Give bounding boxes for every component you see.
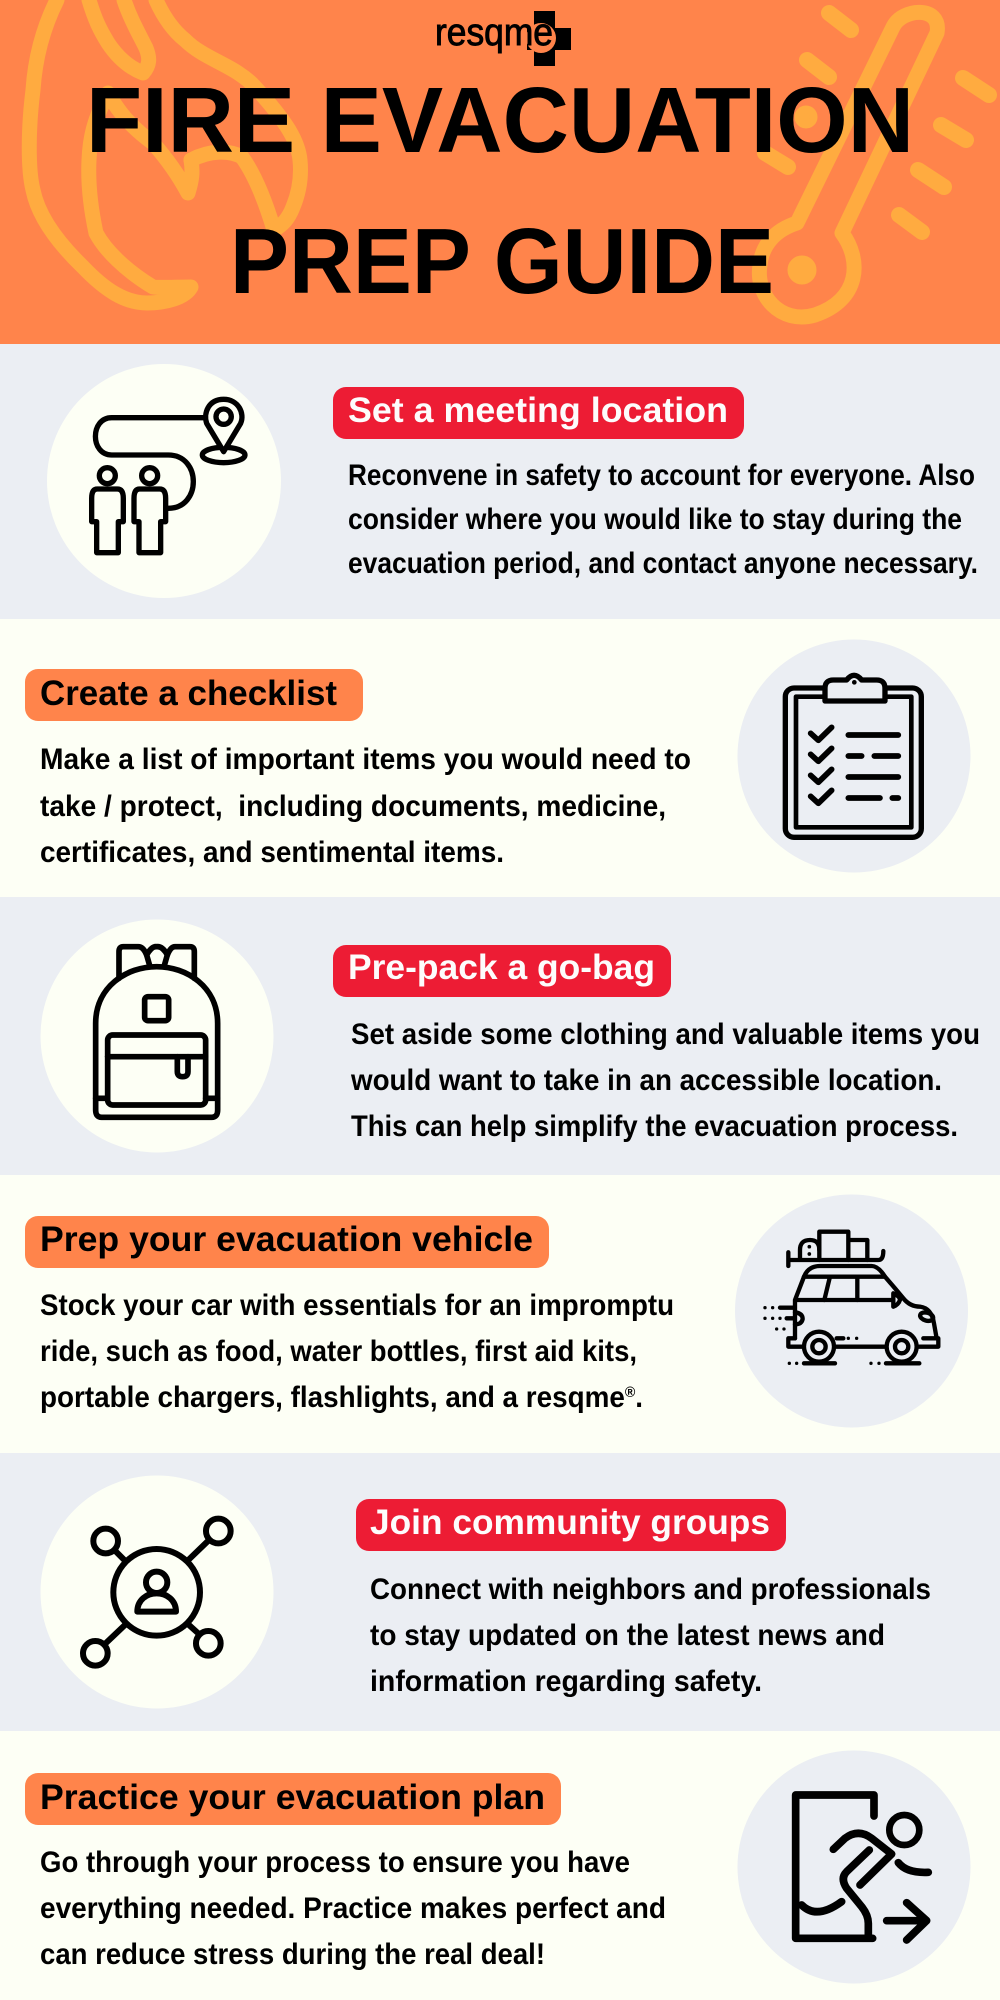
panel: join community groups (0, 1453, 1000, 1731)
heading pill: Create a checklist (40, 674, 337, 713)
body text: portable chargers, flashlights, and a resqme (40, 1381, 660, 1414)
body text: Go through your process to ensure you have (40, 1846, 630, 1879)
body text: Connect with neighbors and professionals (370, 1573, 931, 1606)
body text: everything needed. Practice makes perfect and (40, 1892, 666, 1925)
icon: clipboard checklist (738, 640, 970, 872)
body text: ® (625, 1384, 635, 1401)
icon: people route to map pin (47, 364, 281, 598)
body text: Stock your car with essentials for an impromptu (40, 1289, 674, 1322)
heading pill (25, 669, 363, 721)
icon: loaded car (735, 1194, 968, 1428)
panel: practice your evacuation plan (0, 1731, 1000, 2000)
icon: backpack (40, 920, 274, 1152)
heading pill: Pre-pack a go-bag (348, 948, 655, 987)
heading pill: Prep your evacuation vehicle (40, 1220, 533, 1259)
body text (40, 1846, 666, 1971)
body text: can reduce stress during the real deal! (40, 1938, 545, 1971)
body text: take / protect, including documents, medicine, (40, 790, 666, 823)
panel: set a meeting location (0, 344, 1000, 619)
title (86, 68, 914, 313)
heading pill (333, 945, 671, 997)
body text: to stay updated on the latest news and (370, 1619, 885, 1652)
heading pill (25, 1773, 561, 1825)
heading pill (356, 1499, 786, 1551)
heading pill (333, 387, 744, 439)
body text: certificates, and sentimental items. (40, 836, 504, 869)
heading pill (25, 1216, 549, 1268)
body text: information regarding safety. (370, 1665, 762, 1698)
body text (348, 459, 978, 580)
body text (40, 1289, 674, 1414)
heading pill: Set a meeting location (348, 391, 728, 430)
icon: person running out of door (738, 1750, 970, 1984)
icon: background flame (29, 0, 301, 303)
panel: create a checklist (0, 619, 1000, 897)
body text (40, 743, 691, 869)
icon: community network (40, 1476, 274, 1708)
body text (370, 1573, 931, 1698)
heading pill: Join community groups (370, 1503, 770, 1542)
title: FIRE EVACUATION (86, 68, 914, 172)
body text: Make a list of important items you would need to (40, 743, 691, 776)
heading pill: Practice your evacuation plan (40, 1778, 545, 1817)
panel: pre-pack a go-bag (0, 897, 1000, 1175)
logo: resqme: resqme (435, 12, 553, 54)
body text: This can help simplify the evacuation process. (351, 1110, 958, 1143)
body text: would want to take in an accessible location. (350, 1064, 942, 1097)
title: PREP GUIDE (230, 209, 774, 313)
panel: header (0, 0, 1000, 344)
body text: ride, such as food, water bottles, first aid kits, (40, 1335, 637, 1368)
panel: prep your evacuation vehicle (0, 1175, 1000, 1453)
body text: . (635, 1381, 643, 1414)
body text (350, 1018, 980, 1143)
icon: background thermometer (759, 12, 989, 317)
